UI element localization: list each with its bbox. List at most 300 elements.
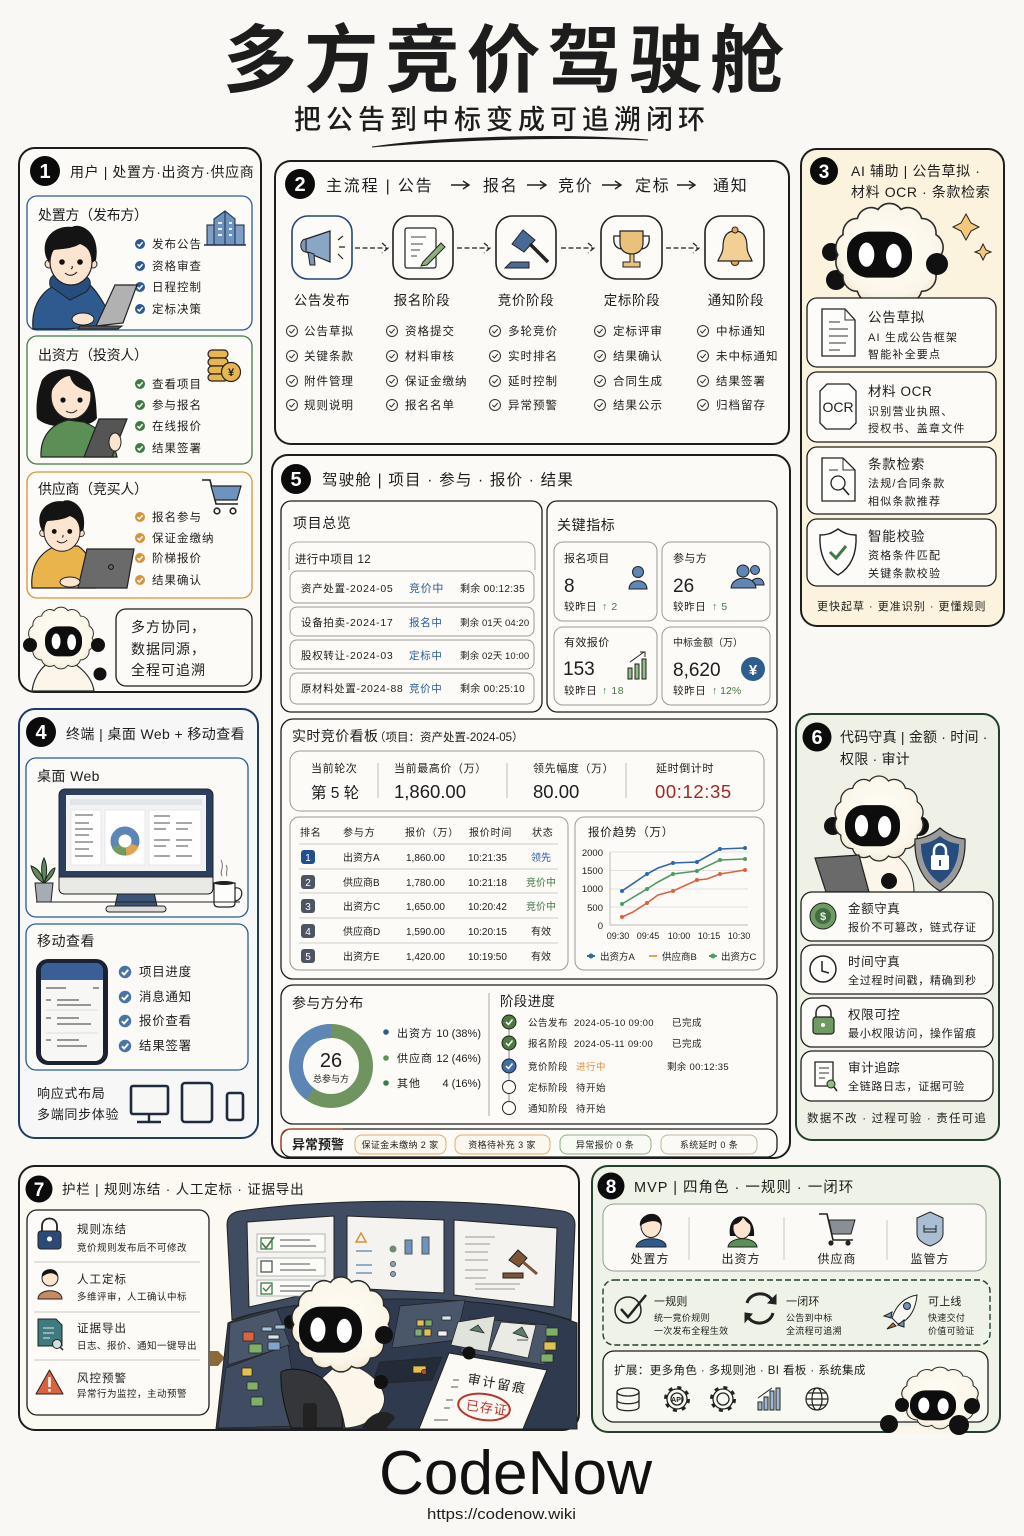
stats strip: 当前最高价（万） (394, 761, 487, 775)
card: time truth: 全过程时间戳，精确到秒 (848, 973, 977, 987)
item: manual award: 多维评审，人工确认中标 (77, 1291, 187, 1303)
list: 日程控制 (152, 280, 202, 294)
progress steps: 公告发布 (528, 1017, 568, 1029)
callout: 全程可追溯 (131, 662, 206, 678)
bid table: 排名 (300, 826, 322, 839)
checklist: award (594, 324, 663, 412)
checklist: award: 结果公示 (613, 399, 663, 412)
card: permission: 最小权限访问，操作留痕 (848, 1026, 977, 1040)
row 3: 剩余 02天 10:00 (460, 650, 529, 662)
panel 2: main flow (275, 161, 789, 444)
card: clause search: 条款检索 (868, 456, 925, 472)
responsive note: 响应式布局 (37, 1086, 106, 1101)
principles dashed box (603, 1280, 990, 1345)
one loop: 一闭环 (786, 1295, 820, 1308)
extension box: 扩展：更多角色 · 多规则池 · BI 看板 · 系统集成 (614, 1363, 866, 1377)
card: time truth: 时间守真 (848, 955, 900, 969)
icon: API gear (666, 1388, 688, 1410)
launch: 价值可验证 (928, 1325, 975, 1336)
card: amount truth: 报价不可篡改，链式存证 (848, 920, 977, 934)
metric: award amount: 中标金额（万） (673, 636, 743, 649)
line chart: 500 (587, 903, 603, 914)
metric: signups: ↑ 2 (602, 601, 618, 613)
donut legend: 出资方 (397, 1026, 433, 1040)
badge 3: 3 (819, 162, 829, 183)
progress steps: 2024-05-10 09:00 (574, 1018, 654, 1029)
donut legend: 供应商 (397, 1051, 433, 1065)
metric: participants (662, 542, 770, 621)
checklist: announcement (286, 324, 354, 412)
list: 结果签署 (152, 441, 202, 455)
icon: gear (712, 1388, 734, 1410)
panel: live bid board (281, 719, 777, 979)
badge 8 (598, 1172, 624, 1200)
panel 5 heading: 驾驶舱 | 项目 · 参与 · 报价 · 结果 (322, 471, 574, 489)
alert bar: 保证金未缴纳 2 家 (361, 1139, 439, 1150)
icon: globe (806, 1388, 828, 1410)
list: 报名参与 (152, 510, 202, 524)
badge 5: 5 (290, 469, 302, 491)
panel: project overview (281, 501, 542, 712)
row 1: 资产处置-2024-05 (301, 582, 393, 595)
checklist: announcement: 公告草拟 (304, 324, 354, 338)
donut legend: 其他 (397, 1077, 421, 1090)
phone illustration (36, 959, 108, 1065)
progress steps: 2024-05-11 09:00 (574, 1039, 653, 1050)
card: amount truth (801, 892, 993, 941)
metric: valid bids: 较昨日 (564, 684, 597, 697)
row 4: 4 (305, 927, 311, 938)
badge 1: 1 (39, 161, 51, 183)
progress steps: 已完成 (672, 1017, 702, 1029)
metric: participants: 较昨日 (673, 600, 706, 613)
panel: key metrics (547, 501, 777, 712)
donut legend: 10 (38%) (436, 1028, 481, 1040)
row 1 (290, 571, 534, 603)
card: desktop web (26, 758, 248, 917)
row 4: 竞价中 (409, 682, 442, 695)
card: OCR: OCR (822, 399, 854, 415)
bid table: 报价（万） (405, 826, 459, 839)
checklist: bidding: 延时控制 (508, 374, 558, 388)
step: announcement (292, 216, 352, 308)
icon: coins (208, 350, 240, 382)
underline stroke (372, 136, 648, 147)
metric: award amount: ↑ 12% (712, 685, 741, 697)
panel 3 heading (851, 163, 990, 200)
list: 查看项目 (152, 377, 202, 391)
icon: cart (202, 480, 241, 514)
step: bidding (496, 216, 556, 308)
right screen (454, 1220, 557, 1307)
row 3 (290, 640, 534, 669)
checklist: notify: 结果签署 (716, 374, 766, 388)
checklist: announcement: 规则说明 (304, 398, 354, 412)
bid table: 状态 (532, 826, 554, 839)
chart legend: 出资方A (600, 951, 636, 963)
item: evidence export: 证据导出 (77, 1321, 127, 1335)
panel 7 heading: 护栏 | 规则冻结 · 人工定标 · 证据导出 (62, 1182, 304, 1197)
metric: award amount (662, 627, 770, 705)
row 4: 供应商D (343, 925, 380, 938)
row 1: 1 (305, 853, 311, 864)
panel 8: MVP (592, 1166, 1000, 1435)
donut legend: 12 (46%) (436, 1053, 481, 1065)
row 5: 出资方E (343, 950, 380, 963)
checklist: announcement: 附件管理 (304, 374, 354, 388)
person: yellow with laptop (32, 500, 134, 588)
checklist: signup: 材料审核 (405, 349, 455, 363)
badge 2 (285, 169, 315, 199)
stats strip: 第 5 轮 (311, 784, 359, 802)
metric: award amount: 8,620 (673, 660, 721, 681)
responsive note (37, 1086, 119, 1122)
metric: signups (554, 542, 657, 621)
progress steps: 待开始 (576, 1103, 606, 1115)
row 3 (301, 899, 556, 913)
card: draft: AI 生成公告框架 (868, 330, 958, 344)
panel 6: code truth (796, 714, 999, 1140)
progress steps: 已完成 (672, 1038, 702, 1050)
line chart: 1000 (582, 884, 603, 895)
line chart: 报价趋势（万） (588, 825, 674, 839)
badge 4: 4 (35, 722, 47, 744)
extension box (603, 1351, 988, 1422)
arrow (666, 243, 699, 253)
progress steps: 待开始 (576, 1082, 606, 1094)
badge 5 (281, 464, 311, 494)
badge 3 (810, 157, 838, 185)
checklist: announcement: 关键条款 (304, 349, 354, 363)
stats strip: 1,860.00 (394, 781, 466, 802)
document: audit trail (419, 1353, 547, 1429)
icon: mug (36, 860, 242, 907)
item: manual award: 人工定标 (77, 1272, 127, 1286)
launch: 快速交付 (928, 1312, 965, 1323)
progress steps: 剩余 00:12:35 (667, 1061, 729, 1073)
donut chart: 总参与方 (313, 1073, 349, 1084)
list: 发布公告 (152, 237, 202, 251)
row 4: 有效 (531, 925, 551, 938)
cockpit illustration (216, 1201, 577, 1430)
one loop (745, 1294, 842, 1336)
card: OCR: 授权书、盖章文件 (868, 421, 966, 435)
arrow (561, 243, 594, 253)
line chart: 09:30 (607, 931, 629, 941)
card: supplier (27, 472, 252, 598)
list (135, 237, 202, 316)
checklist: bidding: 多轮竞价 (508, 324, 558, 338)
roles strip (603, 1204, 986, 1271)
metric: valid bids: 有效报价 (564, 635, 610, 649)
step: notify: 通知阶段 (708, 292, 764, 308)
row 4: 10:20:15 (468, 927, 507, 938)
control buttons (218, 1300, 558, 1428)
icon: bars (758, 1388, 780, 1410)
card title: 处置方（发布方） (38, 207, 148, 223)
panel 2 heading: 竞价 (558, 177, 594, 195)
panel 3 heading: 材料 OCR · 条款检索 (851, 184, 990, 200)
checklist: bidding (490, 324, 558, 412)
progress steps: 竞价阶段 (528, 1061, 568, 1073)
item: risk alert: 风控预警 (77, 1371, 127, 1385)
card title: 桌面 Web (37, 768, 100, 784)
stats strip (290, 751, 764, 811)
line chart: 10:00 (668, 931, 690, 941)
row 4: 原材料处置-2024-88 (301, 682, 403, 695)
one rule (615, 1294, 728, 1336)
row 2 (301, 875, 556, 889)
card: audit (801, 1051, 993, 1101)
panel 1 heading: 用户 | 处置方·出资方·供应商 (70, 164, 254, 180)
donut chart (296, 1031, 366, 1101)
progress steps: 定标阶段 (528, 1082, 568, 1094)
row 4: 1,590.00 (406, 927, 445, 938)
stats strip: 领先幅度（万） (533, 761, 614, 775)
item: evidence export: 日志、报价、通知一键导出 (77, 1340, 197, 1352)
item: rule freeze: 规则冻结 (77, 1222, 127, 1236)
card: amount truth: $ (820, 911, 826, 923)
line chart (575, 817, 764, 970)
stats strip: 当前轮次 (311, 761, 357, 775)
row 1: 剩余 00:12:35 (460, 582, 525, 595)
list (135, 377, 202, 455)
panel 4 heading: 终端 | 桌面 Web + 移动查看 (66, 726, 245, 742)
list: 消息通知 (139, 989, 192, 1004)
chart legend: 供应商B (662, 951, 697, 963)
chair (281, 1369, 342, 1428)
checklist: award: 结果确认 (613, 350, 663, 363)
list: 结果确认 (152, 574, 202, 587)
card: verify: 关键条款校验 (868, 566, 941, 580)
metric: participants: ↑ 5 (712, 601, 728, 613)
card: permission (801, 998, 993, 1047)
checklist: signup: 资格提交 (405, 324, 455, 338)
row 4 (290, 673, 534, 704)
checklist: notify: 归档留存 (716, 398, 766, 412)
panel 2 heading: 主流程 | 公告 (326, 177, 433, 195)
panel 5: cockpit (272, 455, 790, 1158)
checklist: bidding: 实时排名 (508, 349, 558, 363)
guardrail list (27, 1210, 209, 1415)
footer logo: CodeNow (379, 1439, 652, 1508)
progress steps: 报名阶段 (528, 1038, 568, 1050)
progress steps (502, 1015, 729, 1115)
progress steps: 进行中 (576, 1061, 606, 1073)
callout: 数据同源， (131, 641, 206, 657)
row 5: 有效 (531, 950, 551, 963)
document: audit trail: 审计留痕 (466, 1371, 528, 1396)
card: time truth (801, 945, 993, 994)
alert bar: 系统延时 0 条 (680, 1139, 738, 1150)
one rule: 一次发布全程生效 (654, 1325, 728, 1336)
metric: award amount: ¥ (749, 662, 758, 679)
list (119, 964, 192, 1053)
panel 6 heading: 权限 · 审计 (840, 751, 910, 767)
card: audit: 审计追踪 (848, 1060, 900, 1075)
line chart: 10:15 (698, 931, 720, 941)
checklist: notify (698, 324, 778, 412)
row 2: 设备拍卖-2024-17 (301, 616, 393, 629)
row 2: 供应商B (343, 876, 380, 889)
list (135, 510, 214, 587)
left screen (247, 1216, 334, 1307)
badge 6: 6 (811, 727, 823, 749)
list: 定标决策 (152, 302, 202, 316)
checklist: bidding: 异常预警 (508, 398, 558, 412)
badge 8: 8 (606, 1177, 616, 1198)
row 4 (301, 924, 551, 938)
row 2 (290, 607, 534, 636)
card: amount truth: 金额守真 (848, 901, 900, 916)
checklist: award: 定标评审 (613, 324, 663, 338)
metric: signups: 8 (564, 576, 575, 597)
step: award: 定标阶段 (604, 293, 660, 308)
card: verify: 资格条件匹配 (868, 548, 941, 562)
panel 3: AI assist (801, 149, 1004, 626)
icon: coins: ¥ (228, 367, 235, 379)
mascot with laptop and shield (815, 776, 965, 892)
panel: participant distribution and stage progress: 参与方分布 (292, 995, 364, 1011)
chart legend (587, 951, 757, 963)
metric: award amount: 较昨日 (673, 684, 706, 697)
card: OCR: 识别营业执照、 (868, 404, 953, 418)
card: mobile (26, 924, 248, 1070)
footer line: 更快起草 · 更准识别 · 更懂规则 (817, 599, 987, 613)
badge 6 (802, 722, 832, 752)
row 5: 5 (305, 952, 311, 963)
row 3: 出资方C (343, 900, 380, 913)
bid table: 报价时间 (469, 826, 512, 839)
role: regulator (910, 1212, 950, 1266)
item: rule freeze (38, 1218, 187, 1254)
middle screen (347, 1216, 444, 1293)
row 2: 10:21:18 (468, 878, 507, 889)
footer line: 数据不改 · 过程可验 · 责任可追 (807, 1111, 987, 1125)
badge 7 (26, 1176, 52, 1202)
list: 在线报价 (152, 419, 202, 433)
card title: 出资方（投资人） (38, 347, 148, 363)
stats strip: 00:12:35 (655, 781, 732, 802)
arrow (355, 243, 388, 253)
row 1: 1,860.00 (406, 853, 445, 864)
alert bar (281, 1129, 777, 1157)
mascot peeking (880, 1367, 980, 1435)
arrow (210, 1351, 225, 1366)
row 2: 剩余 01天 04:20 (460, 617, 529, 629)
alert bar: 异常报价 0 条 (576, 1139, 634, 1150)
alert bar: 资格待补充 3 家 (468, 1139, 536, 1150)
list: 项目进度 (139, 964, 192, 979)
metric: valid bids (554, 627, 657, 705)
mascot pilot (284, 1277, 395, 1430)
line chart: 10:30 (728, 931, 750, 941)
card title: 移动查看 (37, 933, 95, 949)
row 1: 出资方A (343, 851, 380, 864)
list: 阶梯报价 (152, 551, 202, 565)
card: draft: 智能补全要点 (868, 347, 941, 361)
monitor illustration (59, 789, 213, 912)
progress steps: 通知阶段 (528, 1103, 568, 1115)
checklist: notify: 未中标通知 (716, 349, 778, 363)
role: supplier (817, 1214, 857, 1266)
step: signup (393, 216, 453, 308)
one rule: 一规则 (654, 1294, 688, 1308)
panel 2 heading: 定标 (635, 177, 671, 195)
launch (884, 1294, 975, 1336)
title: 多方竞价驾驶舱 (223, 19, 791, 102)
card: draft (807, 298, 996, 367)
metric: signups: 报名项目 (564, 551, 610, 565)
row 5 (301, 949, 551, 963)
card: draft: 公告草拟 (868, 310, 925, 325)
card title: 供应商（竞买人） (38, 481, 148, 497)
subtitle: 把公告到中标变成可追溯闭环 (294, 105, 710, 135)
metric: participants: 参与方 (673, 551, 707, 565)
checklist: signup: 报名名单 (405, 398, 455, 412)
footer url: https://codenow.wiki (427, 1506, 576, 1523)
card: clause search (807, 447, 996, 514)
panel 1: users (19, 148, 261, 692)
card: OCR (807, 372, 996, 442)
one rule: 统一竞价规则 (654, 1312, 710, 1323)
step: notify (705, 216, 764, 308)
item: manual award (38, 1269, 187, 1303)
metric: valid bids: 153 (563, 659, 595, 680)
line chart: 2000 (582, 848, 603, 859)
bid table (290, 817, 568, 970)
donut chart: 26 (320, 1050, 342, 1072)
icon: building (204, 211, 246, 245)
launch: 可上线 (928, 1294, 962, 1308)
badge 2: 2 (294, 174, 306, 196)
card: clause search: 法规/合同条款 (868, 476, 945, 490)
card: permission: 权限可控 (848, 1007, 900, 1022)
row 5: 1,420.00 (406, 952, 445, 963)
list: 结果签署 (139, 1038, 192, 1053)
checklist: notify: 中标通知 (716, 324, 766, 338)
row 2: 1,780.00 (406, 878, 445, 889)
metric: signups: 较昨日 (564, 600, 597, 613)
item: rule freeze: 竞价规则发布后不可修改 (77, 1242, 187, 1254)
role: supplier: 供应商 (817, 1251, 857, 1266)
mascot with sparkles (822, 203, 991, 306)
responsive note: 多端同步体验 (37, 1107, 119, 1122)
checklist: award: 合同生成 (613, 374, 663, 388)
card: disposer (27, 196, 252, 330)
panel 2 heading: 通知 (713, 177, 749, 195)
mascot (23, 607, 106, 691)
arrow (457, 243, 490, 253)
icon: devices (131, 1083, 243, 1122)
row 3: 10:20:42 (468, 902, 507, 913)
stats strip: 80.00 (533, 781, 579, 802)
panel: participant distribution and stage progress (281, 985, 777, 1124)
card: OCR: 材料 OCR (868, 384, 932, 399)
row 3: 股权转让-2024-03 (301, 649, 393, 662)
line chart: 0 (598, 921, 603, 932)
card: verify (807, 519, 996, 586)
person: hoodie with laptop (33, 226, 137, 329)
step: announcement: 公告发布 (294, 293, 350, 308)
panel 2 heading: 报名 (483, 177, 519, 195)
row 3: 3 (305, 902, 311, 913)
stats strip: 延时倒计时 (656, 762, 714, 775)
step: signup: 报名阶段 (394, 293, 450, 308)
metric: valid bids: ↑ 18 (602, 685, 624, 697)
item: evidence export (38, 1319, 197, 1352)
panel 8 heading: MVP | 四角色 · 一规则 · 一闭环 (634, 1179, 854, 1196)
